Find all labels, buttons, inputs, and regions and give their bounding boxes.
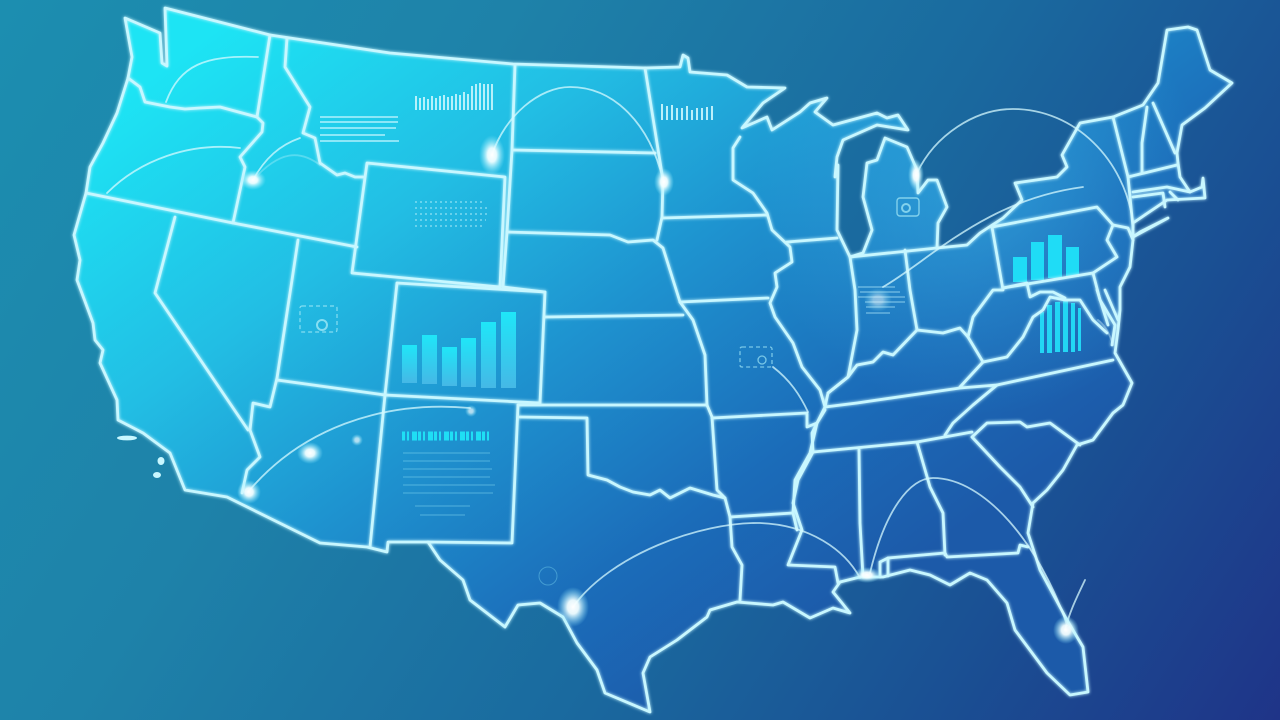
glowing connection nodes: [237, 135, 1079, 644]
islands off California: [117, 436, 164, 478]
chart: Colorado bars: [402, 312, 516, 388]
icon: Missouri panel: [740, 347, 772, 367]
connection arcs: [107, 57, 1133, 630]
text block: Wyoming dotted rows: [415, 202, 487, 226]
chart: Pennsylvania bars: [1013, 235, 1079, 282]
chart: Minnesota thin bars: [662, 104, 712, 120]
icon: Utah panel: [300, 306, 337, 332]
text block: Montana lines: [320, 117, 399, 141]
text block: Indiana lines: [858, 287, 905, 313]
text block: New Mexico heading and rows: [402, 436, 495, 515]
chart: Virginia striped bars: [1040, 300, 1081, 353]
chart: Montana thin bars: [416, 83, 492, 110]
icon: Texas faint circle: [539, 567, 557, 585]
northeast lighter tint: [725, 27, 1232, 440]
icon: Michigan panel: [897, 198, 919, 216]
